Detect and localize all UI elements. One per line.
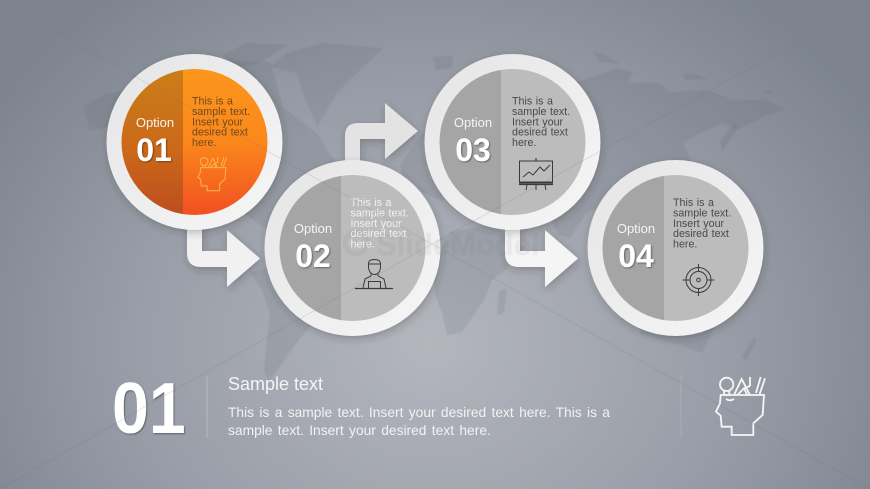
label: Option — [454, 115, 492, 130]
description: sample text. — [673, 207, 731, 219]
icon: head with ideas — [716, 377, 765, 435]
left panel — [122, 70, 183, 214]
ring — [424, 54, 600, 230]
right panel — [183, 69, 268, 215]
option 03 — [424, 54, 600, 230]
option 04 — [588, 160, 764, 336]
description: here. — [512, 137, 536, 149]
description: desired text — [673, 228, 729, 240]
ring — [106, 54, 282, 230]
description: Insert your — [512, 116, 564, 128]
arrow: 02 to 03 — [345, 103, 418, 170]
number: 04 — [618, 238, 654, 274]
left panel — [602, 176, 664, 320]
ring — [588, 160, 764, 336]
description: This is a — [673, 197, 714, 209]
number: 02 — [295, 238, 331, 274]
description: This is a sample text. Insert your desired text here. This is a — [228, 405, 610, 420]
left panel — [280, 176, 341, 320]
description: This is a — [350, 197, 392, 209]
description: desired text — [350, 228, 406, 240]
label: Option — [617, 221, 655, 236]
option 02 — [264, 160, 440, 336]
description: Insert your — [673, 218, 725, 230]
description: sample text. — [512, 106, 570, 118]
description: Insert your — [350, 218, 402, 230]
number: 03 — [455, 132, 491, 168]
description: sample text. — [350, 207, 409, 219]
divider left — [206, 376, 208, 438]
description: sample text. — [192, 106, 250, 118]
description: desired text — [512, 127, 568, 139]
watermark: SlideModel — [376, 227, 540, 262]
world map — [83, 43, 785, 382]
description: This is a — [512, 96, 553, 108]
arrow: 03 to 04 — [505, 222, 578, 287]
description: sample text. Insert your desired text here. — [228, 423, 491, 438]
label: Option — [294, 221, 332, 236]
ring — [264, 160, 440, 336]
description: desired text — [192, 127, 248, 139]
left panel — [440, 70, 501, 214]
icon: presentation board — [519, 158, 553, 190]
description: here. — [673, 239, 697, 251]
description: here. — [192, 137, 216, 149]
description: Insert your — [192, 116, 244, 128]
option 01 — [106, 54, 282, 230]
right panel — [341, 175, 426, 321]
label: Option — [136, 115, 174, 130]
big number: 01 — [112, 367, 186, 449]
right panel — [664, 175, 748, 321]
description: This is a — [192, 96, 233, 108]
icon: person with laptop — [355, 260, 393, 288]
icon: head with ideas — [198, 157, 226, 191]
number: 01 — [136, 132, 172, 168]
right panel — [501, 69, 586, 215]
divider right — [680, 375, 682, 438]
icon: target — [682, 264, 714, 296]
heading: Sample text — [228, 374, 323, 394]
arrow: 01 to 02 — [187, 222, 260, 287]
description: here. — [350, 239, 375, 251]
